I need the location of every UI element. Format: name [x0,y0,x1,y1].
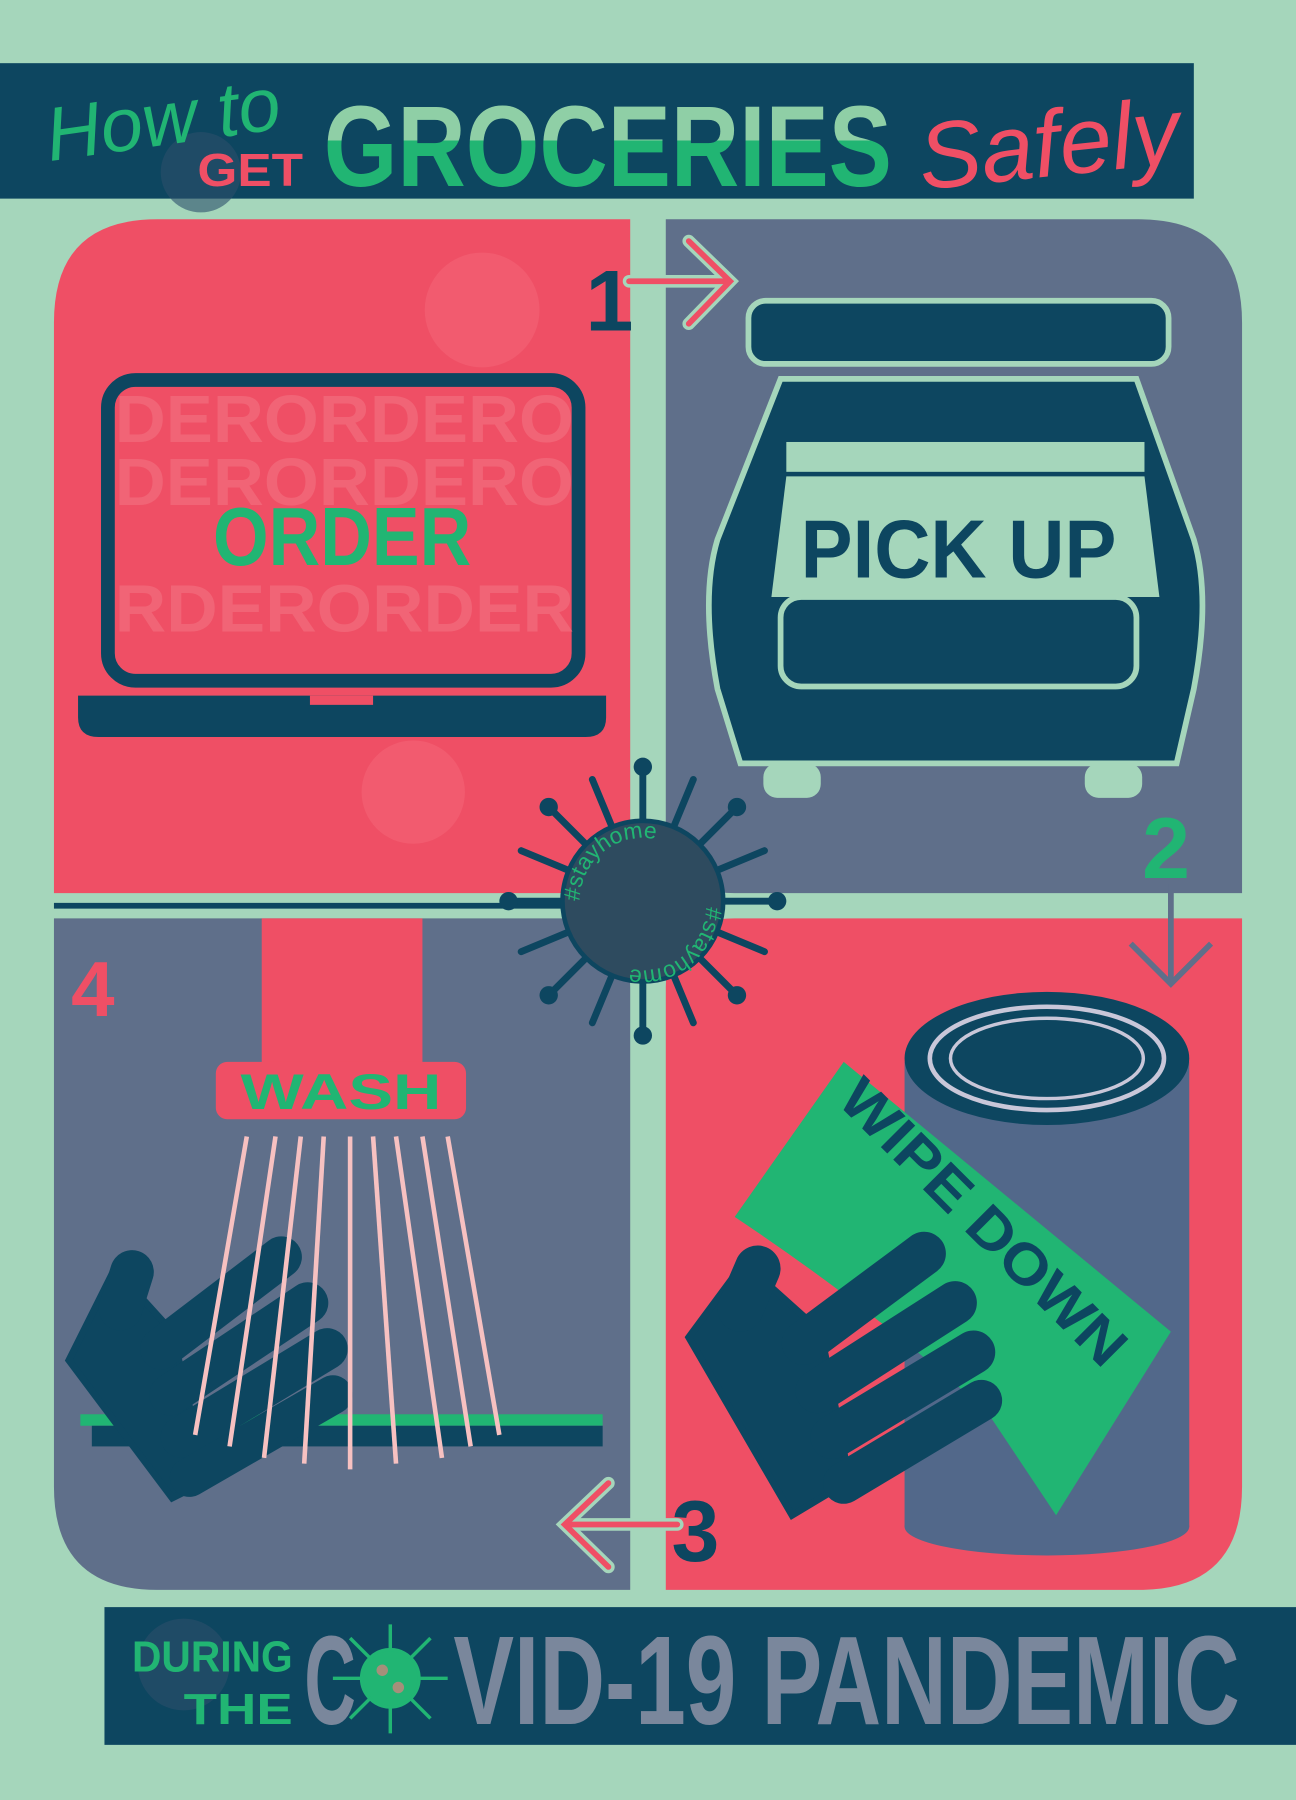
icon: center virus #stayhome: #stayhome [564,826,656,901]
label: PICK UP: PICK UP [801,502,1116,595]
icon: center virus #stayhome [499,758,786,1045]
divider line [54,903,643,908]
arrow 2 [1131,884,1211,984]
text: DURING THE: DURING [132,1633,293,1681]
number 2: 2 [1142,801,1190,897]
icon: car trunk [709,301,1202,798]
icon: laptop: RDERORDER [115,572,574,646]
number 3 and arrow: 3 [672,1484,719,1580]
icon: can [905,992,1189,1555]
number 3 and arrow [565,1483,719,1580]
title: GROCERIES: GROCERIES [324,83,892,211]
number 4: 4 [71,945,115,1033]
panel: wash [54,918,630,1590]
counter [80,1414,603,1426]
icon: laptop: DERORDERO [115,383,574,457]
label: WASH: WASH [240,1063,441,1120]
label: ORDER: ORDER [213,490,471,583]
bottom bar [104,1607,1296,1751]
icon: laptop: DERORDERO [115,446,574,520]
title bar [0,61,1194,212]
panel: pick up [666,219,1242,893]
faucet [262,918,422,1068]
number 1 and arrow [585,241,730,350]
title: GET: GET [197,144,303,196]
icon: laptop [78,380,606,737]
icon: center virus #stayhome: #stayhome [630,907,722,982]
panel: wipe down [666,884,1242,1590]
title: How to: How to [40,61,286,178]
title: Safely: Safely [913,77,1189,210]
icon: cloth [735,1062,1171,1515]
label: WASH [216,1062,466,1120]
text: C: C [304,1610,356,1751]
water rays [195,1136,499,1469]
label: WIPE DOWN: WIPE DOWN [826,1066,1140,1379]
bottom bar: THE [184,1686,293,1734]
number 1 and arrow: 1 [585,254,633,350]
panel: order [54,219,630,893]
icon: virus O [333,1624,448,1733]
icon: hand [689,1254,981,1515]
icon: hand [69,1257,333,1498]
